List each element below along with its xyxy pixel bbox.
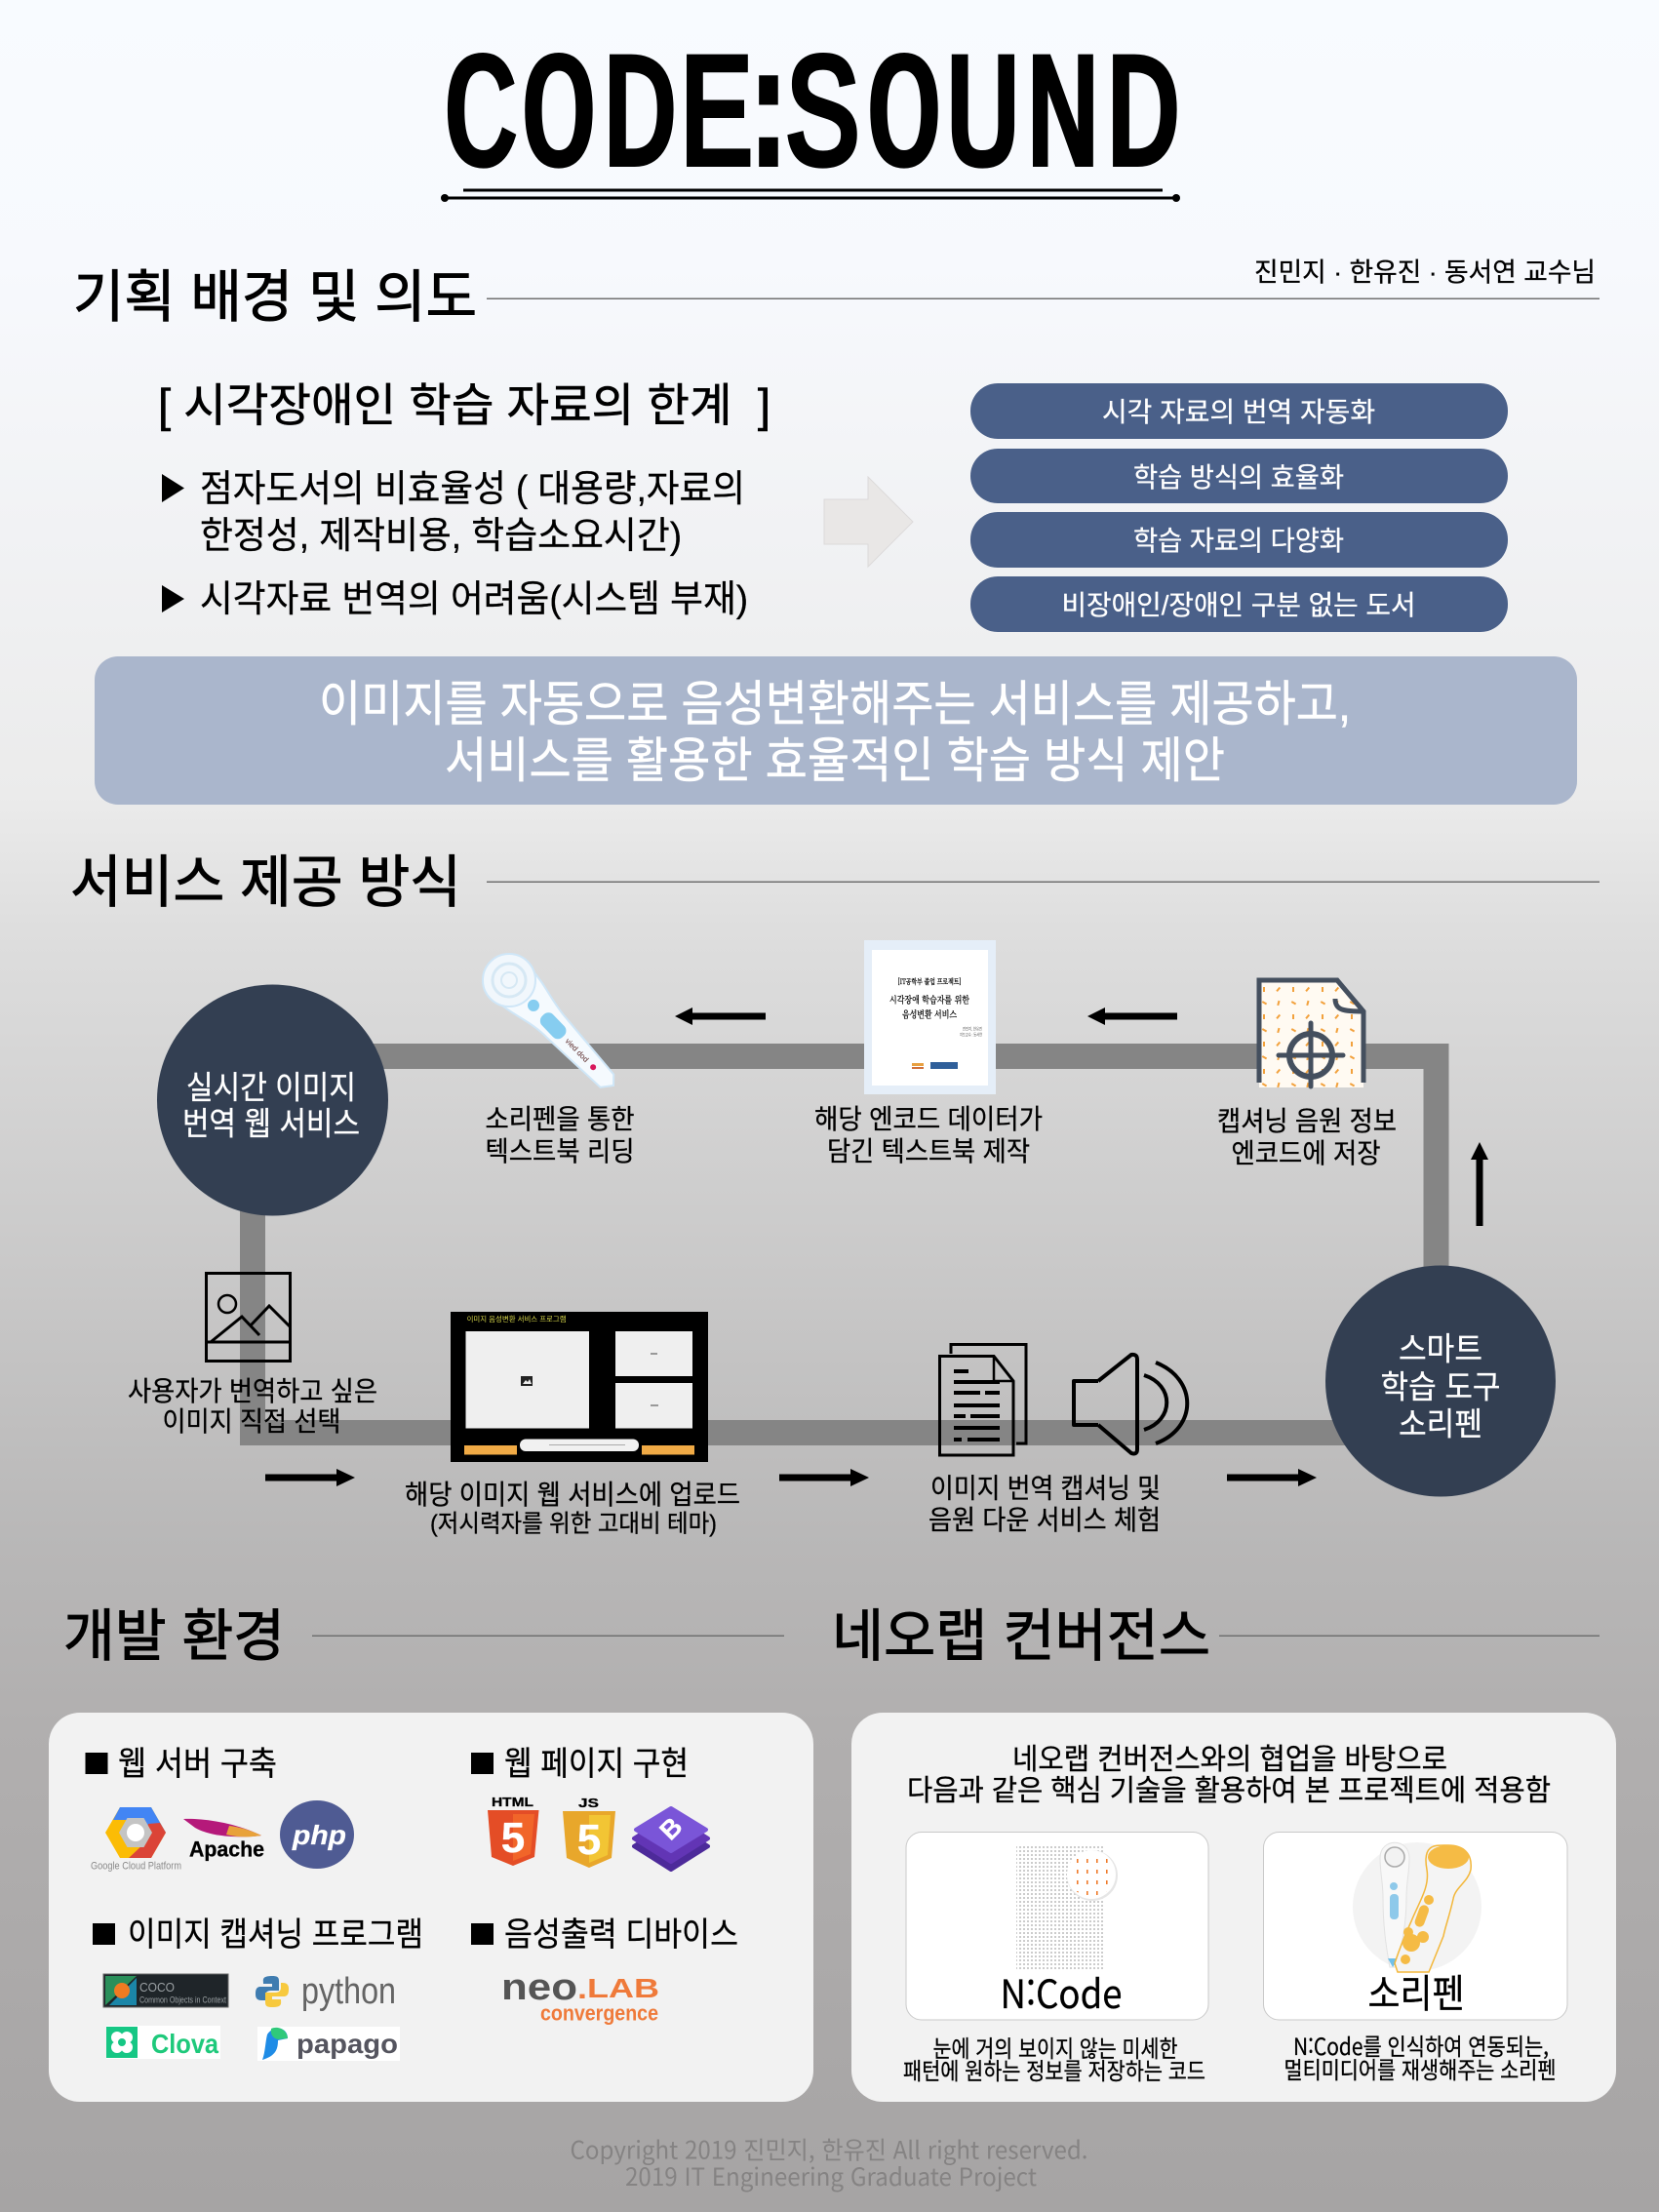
flow path band xyxy=(253,1056,1436,1433)
label: caption experience: 이미지 번역 캡셔닝 및 xyxy=(930,1474,1161,1504)
logo: HTML5 xyxy=(488,1795,538,1866)
label: upload: (저시력자를 위한 고대비 테마) xyxy=(430,1510,717,1537)
logo: COCO: Common Objects in Context xyxy=(139,1995,226,2004)
logo: Bootstrap: B xyxy=(653,1811,689,1846)
logo: PHP xyxy=(280,1800,354,1869)
intro text: 네오랩 컨버전스와의 협업을 바탕으로 xyxy=(1012,1744,1447,1776)
labels: top row: 캡셔닝 음원 정보 xyxy=(1217,1106,1397,1136)
web service screenshot: 이미지 음성변환 서비스 프로그램 xyxy=(467,1314,567,1323)
icon: N:Code document target xyxy=(1259,980,1363,1087)
logo: papago: papago xyxy=(296,2029,398,2059)
title: CODE:SOUND xyxy=(443,29,1181,213)
heading: audio device: 음성출력 디바이스 xyxy=(504,1916,738,1954)
labels: top row: 해당 엔코드 데이터가 xyxy=(814,1104,1043,1134)
labels: top row: 소리펜을 통한 xyxy=(486,1104,634,1134)
circle: smart learning tool xyxy=(1325,1266,1556,1496)
limits of learning materials text block xyxy=(158,379,770,620)
logo: papago xyxy=(257,2027,400,2061)
label: select image xyxy=(128,1376,377,1437)
logo: Google Cloud Platform: Google Cloud Platform xyxy=(91,1861,181,1873)
icon: image picture xyxy=(206,1274,291,1362)
textbook cover: [IT공학부 졸업 프로젝트] xyxy=(897,976,962,987)
logo: Clova xyxy=(106,2026,220,2059)
circle: smart learning tool: 스마트 xyxy=(1399,1330,1482,1366)
icon: speaker xyxy=(1074,1355,1187,1453)
circle: realtime web service: 실시간 이미지 xyxy=(186,1069,356,1105)
panel: NeoLAB convergence xyxy=(851,1713,1616,2102)
heading: NeoLAB convergence: 네오랩 컨버전스 xyxy=(832,1605,1210,1669)
label: upload: 해당 이미지 웹 서비스에 업로드 xyxy=(405,1480,740,1510)
limits of learning materials text block: [ 시각장애인 학습 자료의 한계 ] xyxy=(158,379,770,431)
footer copyright: Copyright 2019 진민지, 한유진 All right reserved. xyxy=(570,2131,1088,2166)
goal pills xyxy=(970,383,1508,632)
limits of learning materials text block: 한정성, 제작비용, 학습소요시간) xyxy=(200,516,682,557)
arrow: left 1 xyxy=(675,1007,766,1025)
arrow: left 2 xyxy=(1087,1007,1177,1025)
logo: JavaScript: JS xyxy=(578,1796,599,1810)
logo: JavaScript: 5 xyxy=(577,1816,601,1864)
logo: python xyxy=(256,1971,396,2012)
labels: top row xyxy=(486,1104,1397,1168)
label: select image: 이미지 직접 선택 xyxy=(162,1406,341,1437)
limits of learning materials text block: 시각자료 번역의 어려움(시스템 부재) xyxy=(200,579,748,620)
textbook cover: 지도교수 : 동서연 xyxy=(960,1032,982,1039)
logo: HTML5: 5 xyxy=(501,1814,525,1862)
logo: JavaScript xyxy=(563,1796,615,1868)
logo: python: python xyxy=(301,1971,396,2012)
logo: neo.LAB convergence: LAB xyxy=(587,1973,659,2003)
icon: sound pen: vied dod xyxy=(564,1037,590,1064)
captions xyxy=(903,2028,1557,2085)
labels: top row: 텍스트북 리딩 xyxy=(486,1136,634,1166)
goal pills: 학습 자료의 다양화 xyxy=(1133,526,1344,556)
label: caption experience xyxy=(928,1474,1161,1535)
logo: neo.LAB convergence xyxy=(501,1967,659,2026)
logo: Clova: Clova xyxy=(151,2029,218,2059)
icon: caption documents xyxy=(940,1344,1026,1455)
intro text: 다음과 같은 핵심 기술을 활용하여 본 프로젝트에 적용함 xyxy=(907,1775,1551,1807)
card: sound pen xyxy=(1264,1832,1567,2020)
card: sound pen: 소리펜 xyxy=(1367,1973,1465,2016)
arrow: up xyxy=(1471,1142,1488,1226)
goal pills: 학습 방식의 효율화 xyxy=(1133,462,1344,493)
card: N:Code xyxy=(906,1832,1208,2020)
logo: Apache: Apache xyxy=(189,1837,264,1862)
logo: Google Cloud Platform xyxy=(91,1807,181,1873)
right pen xyxy=(1395,1845,1471,1972)
heading: development environment: 개발 환경 xyxy=(63,1605,285,1669)
logo: COCO: COCO xyxy=(139,1980,175,1995)
footer copyright xyxy=(570,2131,1088,2193)
circle: smart learning tool: 학습 도구 xyxy=(1381,1368,1500,1404)
heading: web server: 웹 서버 구축 xyxy=(118,1746,277,1783)
goal pills: 시각 자료의 번역 자동화 xyxy=(1102,397,1375,427)
logo: HTML5: HTML xyxy=(492,1795,533,1809)
label: upload xyxy=(405,1480,740,1537)
label: select image: 사용자가 번역하고 싶은 xyxy=(128,1376,377,1406)
logo: PHP: php xyxy=(292,1820,346,1850)
label: caption experience: 음원 다운 서비스 체험 xyxy=(928,1505,1161,1535)
heading: service delivery: 서비스 제공 방식 xyxy=(70,851,461,915)
captions: 멀티미디어를 재생해주는 소리펜 xyxy=(1284,2058,1557,2084)
logo: Apache xyxy=(183,1819,264,1862)
labels: top row: 담긴 텍스트북 제작 xyxy=(827,1136,1030,1166)
footer copyright: 2019 IT Engineering Graduate Project xyxy=(625,2158,1038,2193)
textbook cover xyxy=(864,940,996,1094)
heading: captioning program: 이미지 캡셔닝 프로그램 xyxy=(128,1916,423,1954)
heading: web page: 웹 페이지 구현 xyxy=(504,1746,689,1783)
intro text xyxy=(907,1744,1551,1807)
textbook cover: 음성변환 서비스 xyxy=(902,1007,957,1021)
summary banner: 이미지를 자동으로 음성변환해주는 서비스를 제공하고, xyxy=(319,677,1351,731)
circle: realtime web service xyxy=(157,985,388,1215)
circle: smart learning tool: 소리펜 xyxy=(1399,1405,1482,1442)
limits of learning materials text block: 점자도서의 비효율성 ( 대용량,자료의 xyxy=(200,469,745,510)
logo: neo.LAB convergence: convergence xyxy=(540,2001,658,2026)
authors: 진민지 · 한유진 · 동서연 교수님 xyxy=(1254,257,1596,287)
arrow: right 1 xyxy=(265,1469,355,1486)
captions: 패턴에 원하는 정보를 저장하는 코드 xyxy=(903,2059,1205,2085)
arrow: right 3 xyxy=(1227,1469,1317,1486)
textbook cover: 시각장애 학습자를 위한 xyxy=(889,993,970,1007)
summary banner: 서비스를 활용한 효율적인 학습 방식 제안 xyxy=(445,733,1225,788)
logo: neo.LAB convergence: neo xyxy=(501,1967,577,2008)
captions: N:Code를 인식하여 연동되는, xyxy=(1293,2028,1549,2062)
arrow: right 2 xyxy=(779,1469,869,1486)
panel: development environment xyxy=(49,1713,813,2102)
logo: Bootstrap xyxy=(634,1808,708,1870)
summary banner xyxy=(95,656,1577,805)
web service screenshot xyxy=(451,1312,708,1462)
heading: planning background: 기획 배경 및 의도 xyxy=(73,266,477,330)
textbook cover: 진민지, 한유진 xyxy=(963,1026,982,1033)
labels: top row: 엔코드에 저장 xyxy=(1231,1138,1381,1168)
captions: 눈에 거의 보이지 않는 미세한 xyxy=(932,2036,1178,2063)
logo: neo.LAB convergence: . xyxy=(577,1973,587,2005)
left pen xyxy=(1380,1842,1409,1967)
icon: sound pen xyxy=(472,943,631,1105)
circle: realtime web service: 번역 웹 서비스 xyxy=(182,1105,360,1141)
goal pills: 비장애인/장애인 구분 없는 도서 xyxy=(1061,590,1416,620)
card: N:Code: N:Code xyxy=(1001,1963,1122,2020)
arrow: limits to goals xyxy=(824,477,913,567)
logo: COCO xyxy=(103,1974,228,2007)
